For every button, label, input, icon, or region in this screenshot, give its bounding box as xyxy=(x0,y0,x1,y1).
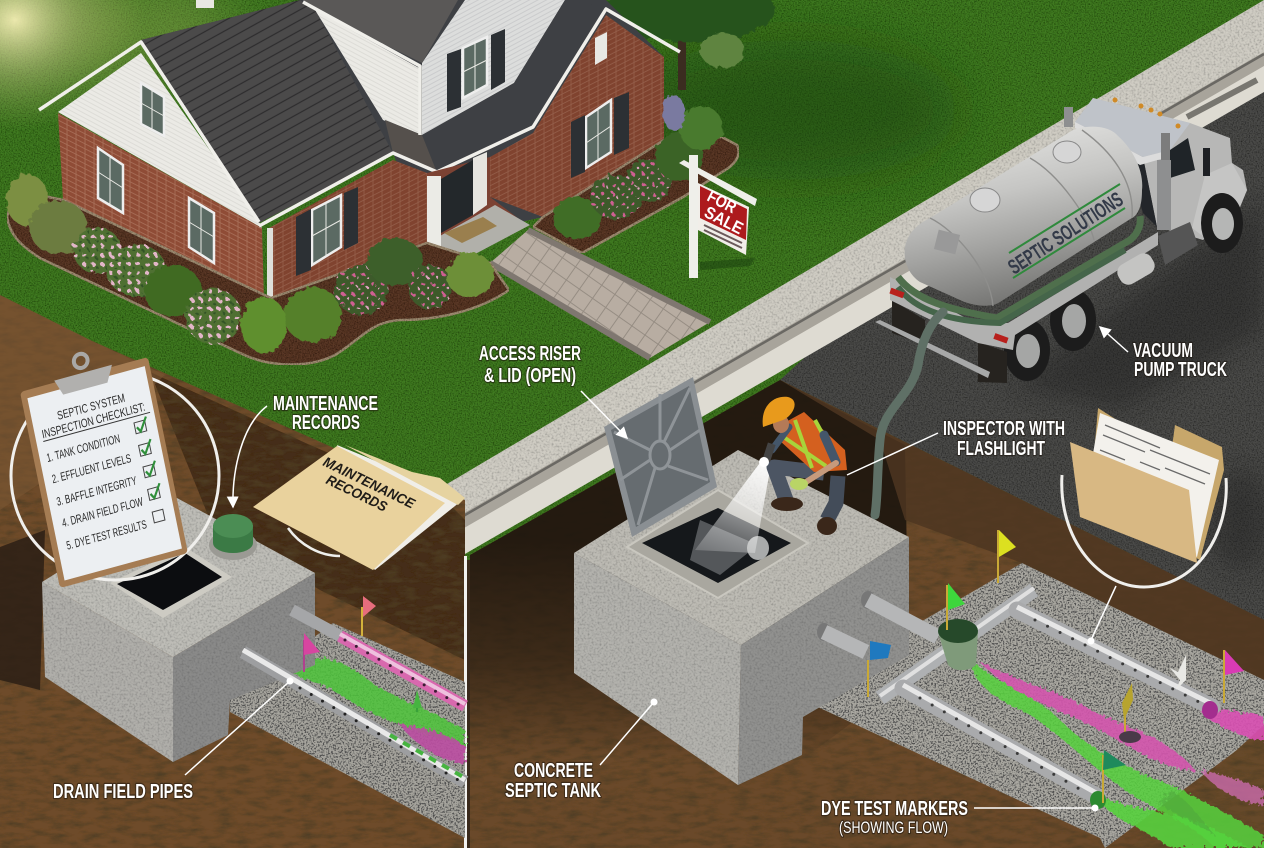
clipboard checklist xyxy=(16,336,188,588)
for sale sign: SALE xyxy=(701,203,746,238)
upper gable roof xyxy=(303,0,458,63)
walkway xyxy=(490,230,710,358)
glove xyxy=(790,478,808,490)
callout: drain field pipes xyxy=(53,678,294,803)
truck bed xyxy=(890,232,1158,350)
checklist items: 3. BAFFLE INTEGRITY xyxy=(55,473,138,509)
right drain field gravel xyxy=(807,563,1264,848)
callout: inspector with flashlight xyxy=(847,418,1065,475)
callout: maintenance records xyxy=(233,393,378,507)
marker lights xyxy=(1112,98,1180,128)
cab xyxy=(1075,98,1247,240)
callout: inspector with flashlight: INSPECTOR WITH xyxy=(943,418,1065,440)
soil cutaway right xyxy=(470,380,1264,848)
left brick wall xyxy=(58,113,264,302)
callout: vacuum pump truck xyxy=(1100,327,1227,381)
hatches xyxy=(970,188,1000,212)
callout: access riser and lid: & LID (OPEN) xyxy=(484,365,576,387)
open lid xyxy=(604,377,717,537)
suction hose xyxy=(875,312,943,515)
checklist items: 1. TANK CONDITION xyxy=(45,431,121,465)
right roof xyxy=(385,0,606,170)
stainless tank xyxy=(905,127,1142,306)
opening xyxy=(110,547,232,618)
mulch garden beds xyxy=(7,137,739,365)
callout: maintenance records: MAINTENANCE xyxy=(273,393,378,415)
right brick gable xyxy=(490,15,664,217)
magnifier circle with open folder xyxy=(1062,408,1226,587)
callout: concrete septic tank xyxy=(505,698,658,802)
shutters xyxy=(296,29,629,276)
left drain pipes xyxy=(243,610,465,784)
callout: access riser and lid: ACCESS RISER xyxy=(479,343,581,365)
callout: drain field pipes: DRAIN FIELD PIPES xyxy=(53,781,193,803)
tree xyxy=(605,0,775,90)
maintenance records folder xyxy=(253,445,465,570)
asphalt road xyxy=(780,90,1264,620)
left drain field gravel xyxy=(230,623,465,838)
mudflaps xyxy=(892,300,925,345)
checklist heading: INSPECTION CHECKLIST: xyxy=(41,400,146,442)
legs xyxy=(774,467,824,500)
flashlight beam xyxy=(695,460,770,553)
check boxes xyxy=(133,417,167,523)
window set xyxy=(98,37,611,265)
front wheel xyxy=(1201,193,1243,253)
steps xyxy=(1158,222,1198,265)
callout: vacuum pump truck: VACUUM xyxy=(1133,340,1193,362)
hard hat xyxy=(763,397,795,427)
callout: concrete septic tank: CONCRETE xyxy=(514,760,593,782)
callout: folder leader to drain pipe xyxy=(1088,586,1116,644)
checklist items: 5. DYE TEST RESULTS xyxy=(65,517,148,553)
checklist items xyxy=(45,429,149,553)
soil cutaway left xyxy=(0,295,465,848)
green stripes xyxy=(1009,184,1125,278)
rear wheels xyxy=(1004,319,1050,381)
metal clip xyxy=(54,365,115,396)
background lawn xyxy=(0,0,1264,560)
tank opening frame xyxy=(627,490,808,598)
roof backing xyxy=(141,0,664,243)
green riser xyxy=(209,530,257,560)
pane grid xyxy=(98,43,611,256)
callout: inspector with flashlight: FLASHLIGHT xyxy=(957,438,1045,460)
chimney xyxy=(196,0,214,8)
left septic tank xyxy=(42,498,315,762)
white marker stake xyxy=(1170,655,1186,690)
orange safety vest xyxy=(779,412,847,472)
vacuum pump truck xyxy=(875,98,1247,383)
white panel divider xyxy=(464,556,467,848)
callout: dye test markers: DYE TEST MARKERS xyxy=(821,798,968,820)
green dye left xyxy=(280,658,465,765)
flashlight xyxy=(762,443,776,462)
callout: concrete septic tank: SEPTIC TANK xyxy=(505,780,601,802)
tail lights xyxy=(889,288,905,298)
left marker flags xyxy=(304,596,422,712)
board xyxy=(20,357,188,588)
exhaust stack xyxy=(1161,133,1170,163)
company name: SEPTIC SOLUTIONS xyxy=(1004,188,1127,279)
face xyxy=(773,415,789,433)
right drain pipes xyxy=(817,588,1218,809)
boots xyxy=(771,497,803,511)
dye plume xyxy=(968,655,1264,848)
right concrete septic tank xyxy=(574,377,909,785)
house xyxy=(39,0,680,302)
green junction box xyxy=(938,632,978,670)
callout: dye test markers: (SHOWING FLOW) xyxy=(839,818,948,837)
dormer side siding xyxy=(315,10,419,135)
maintenance records folder: RECORDS xyxy=(324,471,391,515)
checklist items: 2. EFFLUENT LEVELS xyxy=(51,451,132,486)
upper wall siding xyxy=(422,0,565,135)
main roof xyxy=(141,0,393,223)
front door and porch xyxy=(427,157,527,270)
magnifier circle left xyxy=(11,372,219,580)
right marker flags xyxy=(868,530,1244,803)
front brick wall xyxy=(269,160,427,298)
inspector with flashlight xyxy=(759,397,847,535)
maintenance records folder: MAINTENANCE xyxy=(321,453,418,512)
callout: maintenance records: RECORDS xyxy=(292,412,360,434)
blue shirt sleeve xyxy=(824,435,836,462)
sidewalk and curb xyxy=(425,0,1264,558)
mirror xyxy=(1064,107,1073,127)
callout: access riser and lid xyxy=(479,343,627,438)
green hoses xyxy=(898,216,1140,318)
shrubs xyxy=(6,95,723,353)
white roof trim xyxy=(39,2,680,226)
for sale sign: FOR xyxy=(704,187,740,217)
callout: vacuum pump truck: PUMP TRUCK xyxy=(1134,359,1227,381)
bumper xyxy=(875,320,990,378)
callout: dye test markers xyxy=(821,798,1098,837)
flashlight arm xyxy=(772,427,789,450)
attic vent xyxy=(595,32,607,65)
checklist heading: SEPTIC SYSTEM xyxy=(56,391,126,423)
gable siding xyxy=(58,53,262,228)
paper xyxy=(27,366,182,581)
for sale sign xyxy=(679,155,757,278)
checklist items: 4. DRAIN FIELD FLOW xyxy=(61,494,145,530)
